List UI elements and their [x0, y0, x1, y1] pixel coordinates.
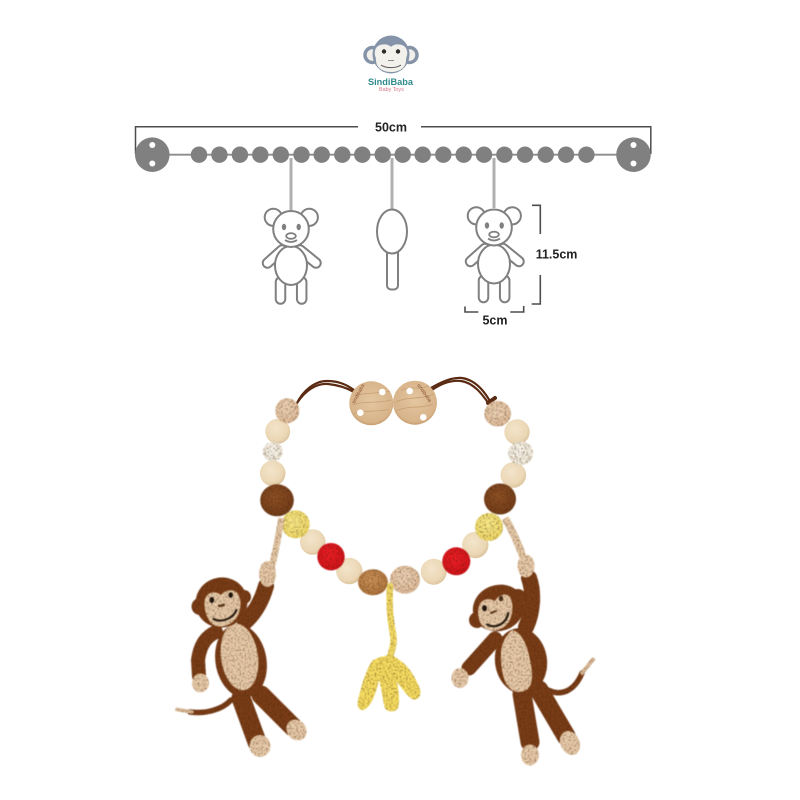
- monkey strap: [272, 518, 282, 566]
- icon: bear outline left: [265, 209, 318, 299]
- monkey limbs: [469, 578, 566, 742]
- beads row: [191, 146, 595, 163]
- wooden beads: [260, 419, 530, 585]
- logo: SindiBaba: [365, 36, 417, 93]
- monkey belly: [501, 630, 532, 692]
- crochet beads: [260, 398, 533, 595]
- clip: wooden left: sindibaba: [351, 383, 366, 405]
- dimension bracket: 50cm: [136, 127, 651, 154]
- icon: bear outline right: [468, 207, 521, 298]
- monkey body: [491, 625, 551, 697]
- logo icon: monkey head: [365, 36, 417, 74]
- logo tagline: Baby Toys: [379, 87, 404, 93]
- label: 50cm: 50cm: [375, 120, 407, 134]
- monkey head: [190, 572, 253, 633]
- clip: wooden left: [349, 381, 393, 425]
- clip: left: [135, 137, 170, 172]
- monkey tail: [548, 673, 582, 693]
- monkey limbs: [198, 586, 293, 742]
- dimension bracket: 5cm: [465, 306, 524, 312]
- clip: right: [616, 137, 651, 172]
- photo: crochet pram chain: [177, 378, 593, 766]
- monkey belly: [217, 621, 262, 693]
- chain cord: [152, 154, 634, 156]
- monkey hands and feet: [452, 554, 584, 766]
- monkey strap: [505, 518, 523, 557]
- cords: [296, 378, 495, 405]
- monkey head: [466, 577, 531, 639]
- toy: crochet banana: [358, 586, 420, 711]
- diagram: chain dimensions: [135, 120, 651, 328]
- label: 11.5cm: 11.5cm: [536, 248, 577, 262]
- toy: crochet monkey left: [177, 518, 311, 757]
- dimension bracket: 11.5cm: [532, 205, 540, 304]
- monkey tail: [190, 700, 231, 712]
- clip: wooden right: sindibaba: [415, 383, 433, 404]
- logo wordmark: SindiBaba: [368, 77, 414, 87]
- monkey hands and feet: [192, 561, 311, 757]
- clip: wooden right: [393, 381, 437, 425]
- label: 5cm: 5cm: [482, 314, 508, 328]
- icon: rattle outline: [377, 210, 407, 290]
- toy: crochet monkey right: [452, 518, 593, 766]
- monkey body: [209, 620, 273, 702]
- hanging strings: [291, 158, 494, 210]
